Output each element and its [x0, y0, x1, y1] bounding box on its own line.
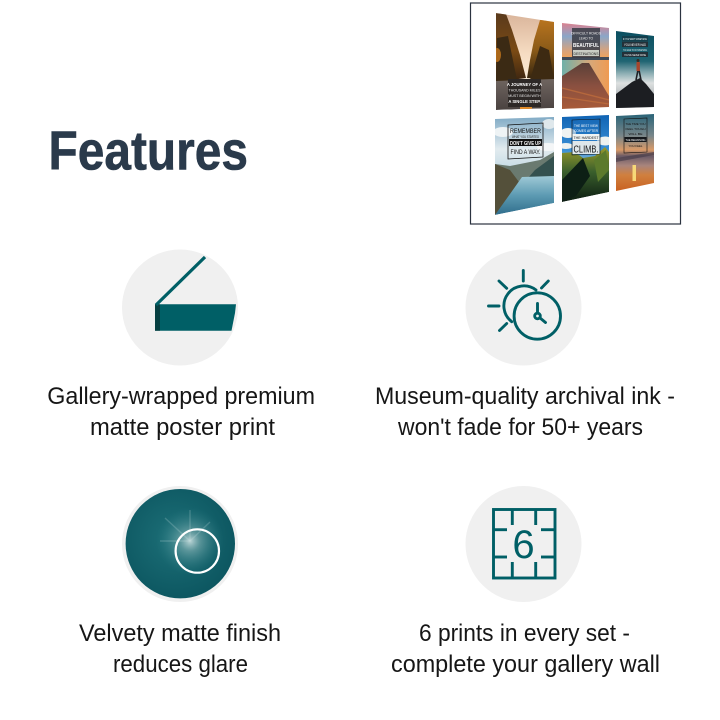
feature: six prints: [391, 486, 660, 678]
poster: green mountain: CLIMB.: [574, 144, 598, 156]
poster: climber on summit: YOU NEVER HAD: [624, 43, 646, 47]
poster: forest road: THOUSAND MILES: [509, 88, 541, 92]
poster: sunset dock: [562, 22, 610, 109]
poster: climber on summit: [616, 30, 654, 108]
icon: glare disc: [122, 486, 238, 602]
icon: sun and clock: [466, 250, 582, 366]
poster: sunset dock: LEAD TO: [579, 36, 594, 40]
feature: archival ink: [375, 250, 675, 441]
feature text: 6 prints in every set -: [419, 620, 630, 647]
product image frame with six posters: [470, 3, 680, 224]
poster: mountain lake: FIND A WAY.: [510, 149, 541, 156]
icon: wrapped canvas edge: [122, 250, 238, 366]
poster: sunset beach: THE TIME YOU: [626, 122, 646, 126]
feature text: [391, 620, 660, 678]
poster: mountain lake: [495, 117, 554, 215]
feature text: Gallery-wrapped premium: [47, 383, 315, 410]
poster: climber on summit: YOU'VE NEVER DONE: [624, 53, 646, 57]
icon: grid with number 6: [466, 486, 582, 602]
poster: sunset beach: FEEL TOUGH: [626, 127, 646, 131]
poster: green mountain: THE HARDEST: [574, 135, 599, 140]
poster: green mountain: THE BEST VIEW: [574, 124, 599, 128]
icon: grid with number 6: 6: [512, 523, 535, 567]
feature text: [375, 383, 675, 441]
title: Features: [48, 120, 248, 182]
poster: mountain lake: WHAT YOU STARTED: [512, 135, 539, 139]
feature text: [79, 620, 281, 678]
poster: sunset beach: [616, 114, 654, 192]
poster: climber on summit: YOU HAVE TO DO SOMETHING: [623, 48, 647, 52]
feature text: reduces glare: [113, 651, 248, 678]
feature text: matte poster print: [90, 414, 275, 441]
poster: sunset dock: DESTINATIONS: [574, 51, 599, 56]
poster: sunset beach: THE BEGINNING: [626, 138, 646, 142]
feature text: won't fade for 50+ years: [397, 414, 643, 441]
poster: forest road: [493, 13, 555, 110]
poster: sunset beach: WILL BE: [628, 132, 642, 136]
poster: mountain lake: REMEMBER: [510, 128, 541, 135]
poster: green mountain: [562, 115, 609, 202]
feature: velvety matte finish: [79, 486, 281, 678]
feature text: complete your gallery wall: [391, 651, 660, 678]
feature: gallery-wrapped print: [47, 250, 315, 441]
poster: sunset dock: BEAUTIFUL: [573, 43, 599, 49]
poster: mountain lake: DON'T GIVE UP: [510, 141, 541, 147]
poster: green mountain: COMES AFTER: [574, 129, 598, 133]
poster: sunset beach: YOU FEEL: [628, 144, 643, 148]
feature text: Museum-quality archival ink -: [375, 383, 675, 410]
poster: climber on summit: IF YOU WANT SOMETHING: [623, 37, 647, 41]
poster: forest road: MUST BEGIN WITH: [508, 94, 541, 98]
poster: forest road: A SINGLE STEP.: [508, 99, 541, 104]
poster: forest road: A JOURNEY OF A: [507, 82, 542, 87]
feature text: [47, 383, 315, 441]
poster: sunset dock: DIFFICULT ROADS: [571, 32, 602, 36]
feature text: Velvety matte finish: [79, 620, 281, 647]
